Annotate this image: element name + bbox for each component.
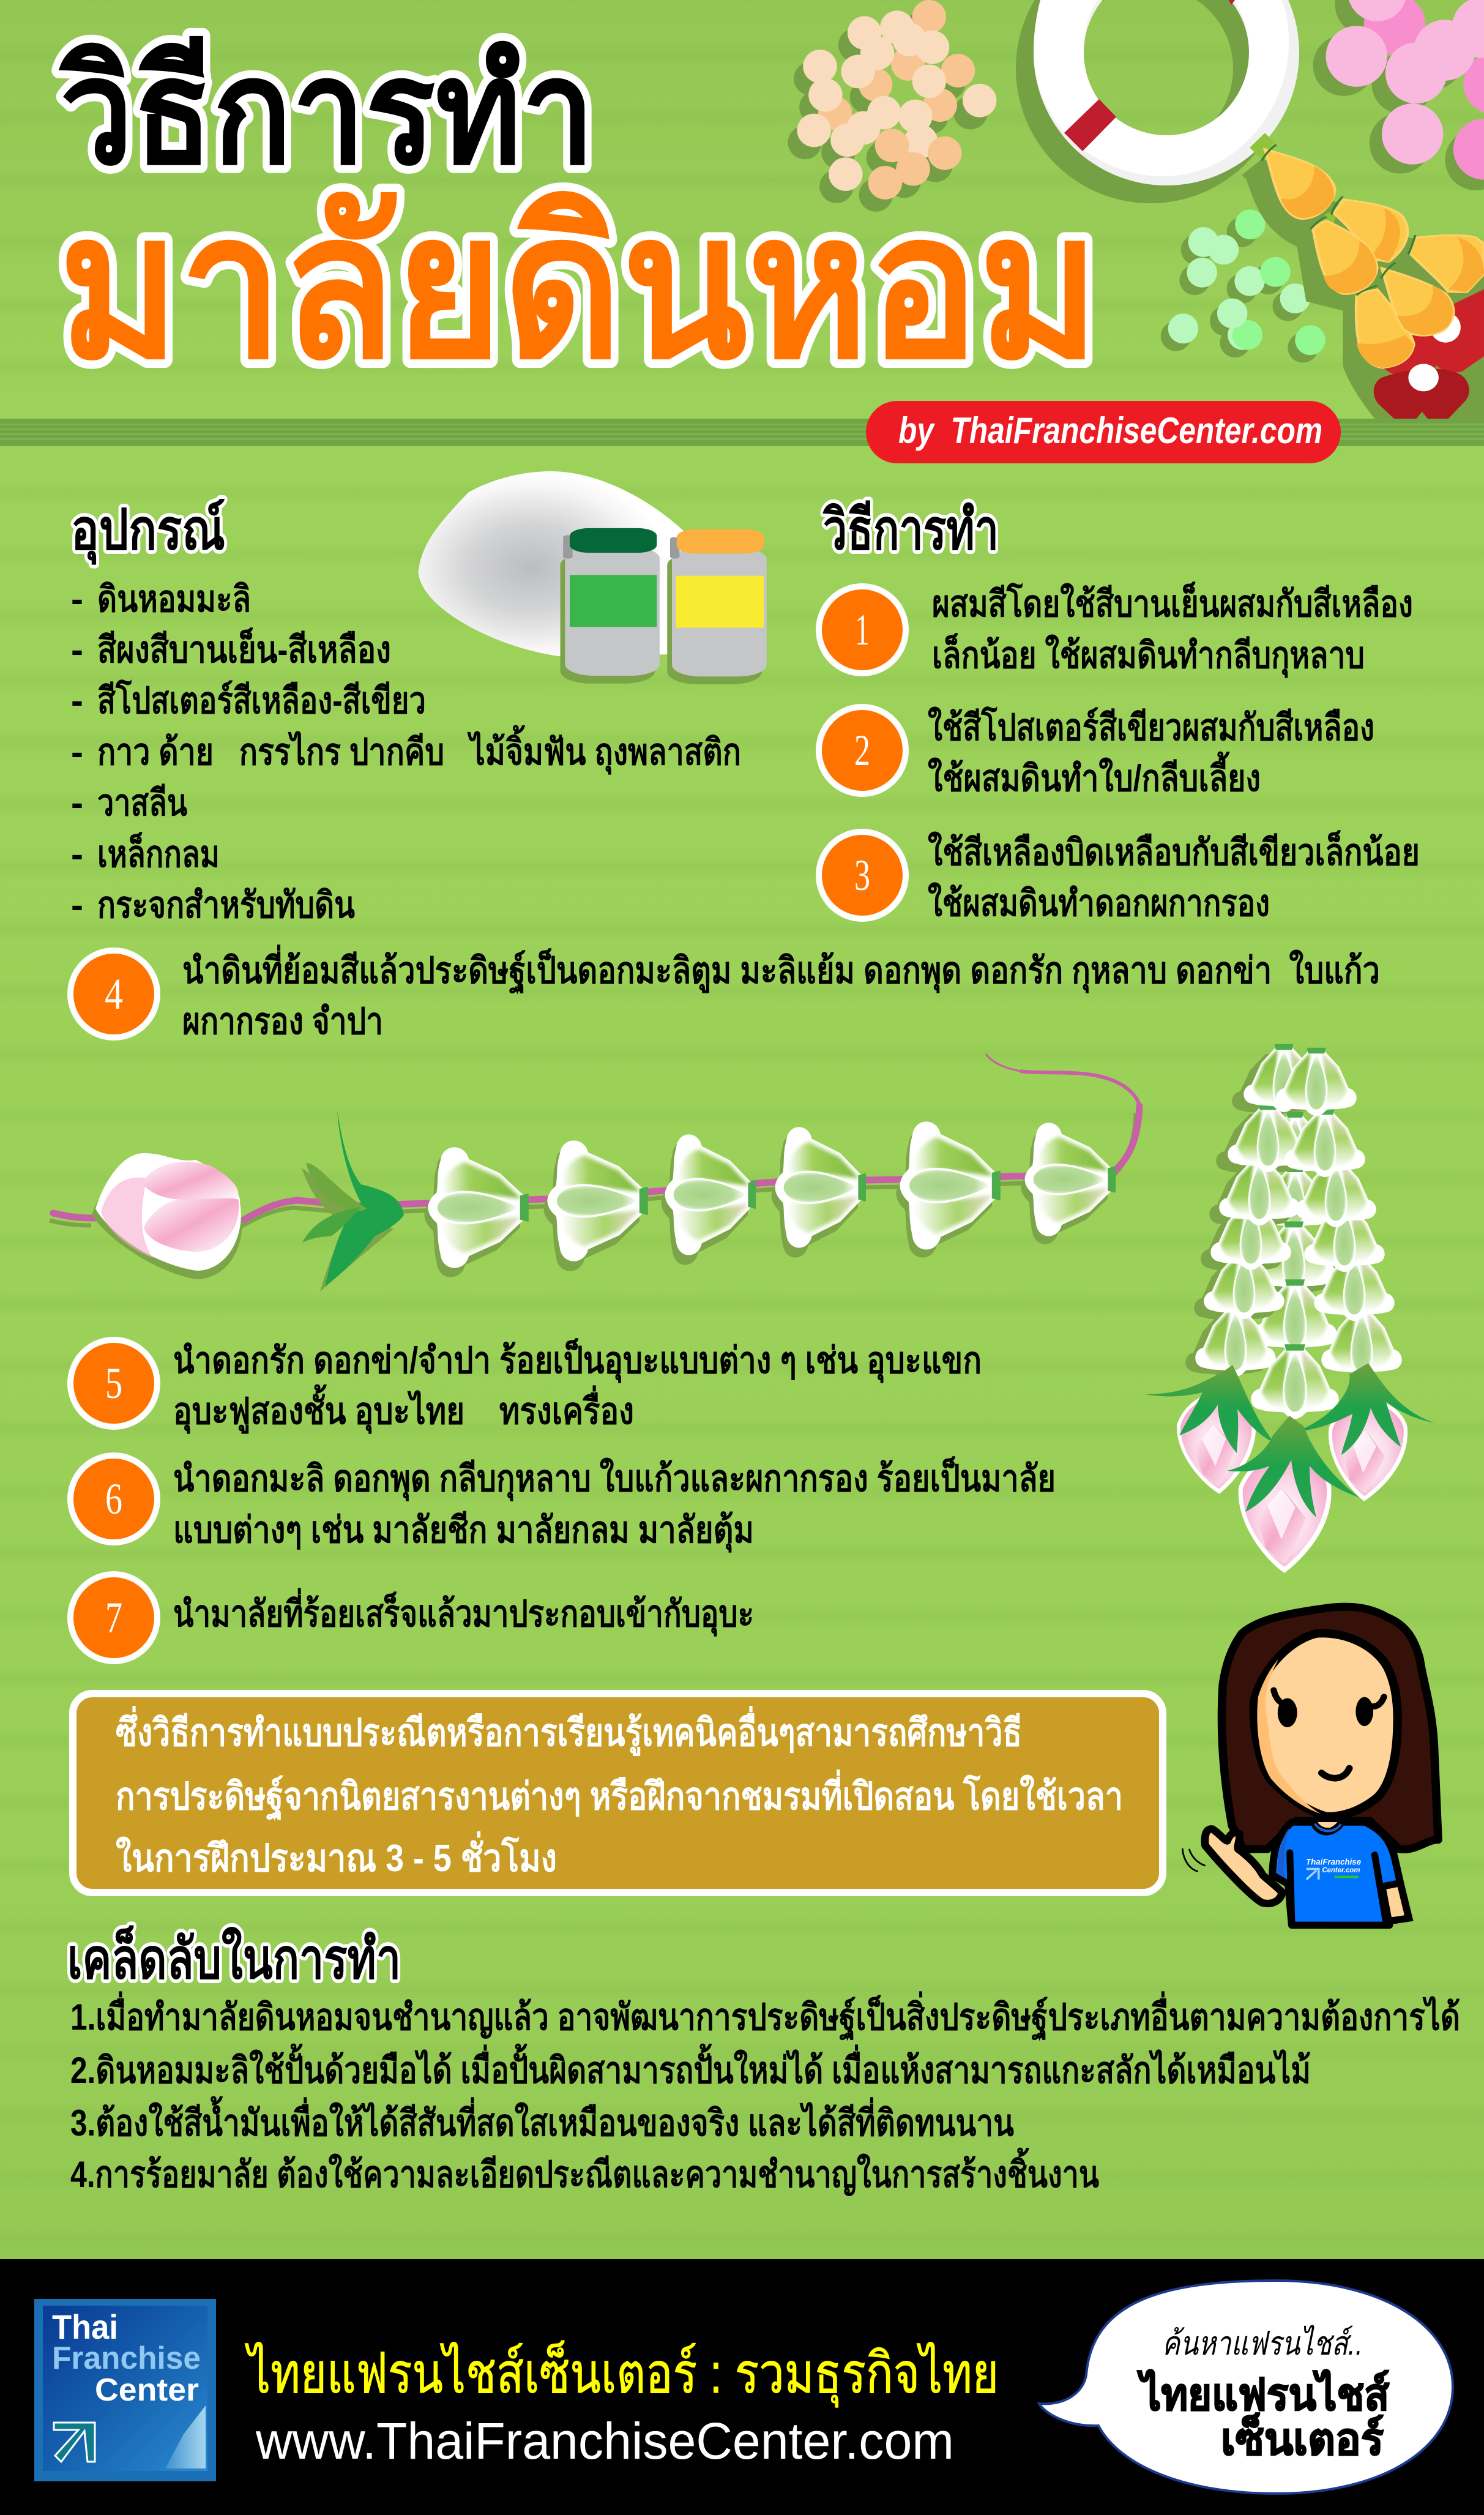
tips list: 3.ต้องใช้สีน้ำมันเพื่อให้ได้สีสันที่สดใสเหมือนของจริง และได้สีที่ติดทนนาน xyxy=(70,2096,1014,2143)
step 7: 7 xyxy=(105,1593,122,1642)
step 3: ใช้ผสมดินทำดอกผกากรอง xyxy=(928,882,1270,924)
list of materials: กาว ด้าย กรรไกร ปากคีบ ไม้จิ้มฟัน ถุงพลาสติก xyxy=(97,725,741,775)
list of materials: เหล็กกลม xyxy=(97,832,220,875)
stem thread xyxy=(50,1054,1139,1227)
decoration: peach beads xyxy=(788,0,996,212)
tips list: 4.การร้อยมาลัย ต้องใช้ความละเอียดประณีตและความชำนาญในการสร้างชิ้นงาน xyxy=(70,2147,1099,2196)
logo: Thai xyxy=(52,2308,118,2346)
illustration: hanging garland xyxy=(1145,1044,1435,1573)
list of materials: - xyxy=(71,834,83,875)
panel: materials xyxy=(71,498,741,925)
green sepals xyxy=(1145,1363,1435,1517)
step 6 xyxy=(70,1456,1056,1553)
step 3 xyxy=(819,830,1420,924)
step 4: 4 xyxy=(105,970,123,1018)
list of materials: สีผงสีบานเย็น-สีเหลือง xyxy=(97,627,391,670)
speech bubble: เซ็นเตอร์ xyxy=(1221,2413,1384,2464)
decoration: pink beads xyxy=(1313,0,1484,190)
right arm stub xyxy=(1382,1883,1409,1922)
eyes xyxy=(1273,1690,1384,1727)
logo xyxy=(34,2299,216,2481)
t-shirt xyxy=(1272,1822,1400,1925)
step 2: 2 xyxy=(854,726,870,775)
list of materials: - xyxy=(71,884,83,925)
callout: further study: ซึ่งวิธีการทำแบบประณีตหรือการเรียนรู้เทคนิคอื่นๆสามารถศึกษาวิธี xyxy=(116,1706,1022,1756)
six jasmine flowers xyxy=(424,1121,1116,1277)
character: waving girl xyxy=(1182,1607,1438,1925)
footer headline: ไทยแฟรนไชส์เซ็นเตอร์ : รวมธุรกิจไทย xyxy=(244,2340,999,2408)
wave marks xyxy=(1182,1849,1205,1871)
step 4 xyxy=(70,944,1380,1042)
decoration: yellow flowers and red blossom xyxy=(1242,133,1484,419)
list of materials: - xyxy=(71,578,83,619)
panel: tips xyxy=(67,1925,1460,2196)
flower column: left xyxy=(1185,1044,1324,1380)
list of materials: - xyxy=(71,629,83,670)
face xyxy=(1254,1633,1398,1817)
step 7 xyxy=(70,1574,754,1661)
speech bubble: ไทยแฟรนไชส์ xyxy=(1137,2369,1389,2420)
sepal leaves xyxy=(302,1110,404,1291)
illustration: horizontal garland xyxy=(50,1054,1139,1291)
callout: further study xyxy=(73,1694,1163,1893)
neck xyxy=(1316,1822,1341,1831)
shirt logo text xyxy=(1306,1857,1361,1880)
callout: further study: การประดิษฐ์จากนิตยสารงานต่างๆ หรือฝึกจากชมรมที่เปิดสอน โดยใช้เวลา xyxy=(116,1769,1123,1821)
smile xyxy=(1322,1768,1349,1778)
tips list xyxy=(70,1991,1460,2196)
step 4: ผกากรอง จำปา xyxy=(182,1001,383,1042)
flower column: right xyxy=(1276,1048,1402,1378)
list of materials: วาสลีน xyxy=(97,782,187,823)
logo: Franchise xyxy=(52,2341,201,2376)
footer xyxy=(0,2259,1484,2515)
clay bag xyxy=(419,471,686,656)
step 2: ใช้สีโปสเตอร์สีเขียวผสมกับสีเหลือง xyxy=(928,706,1374,748)
title: line one: วิธีการทำ xyxy=(58,30,595,194)
step 3: 3 xyxy=(854,851,870,900)
title: line two: มาลัยดินหอม xyxy=(59,173,1100,399)
header band xyxy=(0,419,1484,446)
waving hand xyxy=(1205,1829,1282,1904)
flower: bottom centre xyxy=(1251,1344,1339,1419)
decoration: life ring xyxy=(1016,0,1299,203)
byline badge: by ThaiFranchiseCenter.com xyxy=(898,410,1322,451)
step 1 xyxy=(819,581,1413,678)
yellow paint bottle xyxy=(667,529,767,684)
logo: Center xyxy=(95,2372,199,2408)
decoration: green beads xyxy=(1161,209,1326,363)
footer url: www.ThaiFranchiseCenter.com xyxy=(255,2412,954,2470)
step 5 xyxy=(70,1338,982,1434)
list of materials: ดินหอมมะลิ xyxy=(97,578,251,619)
icon: clay bag and paint bottles xyxy=(419,471,767,684)
shirt logo text: Center.com xyxy=(1322,1866,1360,1874)
shirt logo text: ThaiFranchise xyxy=(1306,1857,1361,1867)
step 7: นำมาลัยที่ร้อยเสร็จแล้วมาประกอบเข้ากับอุบะ xyxy=(173,1588,754,1637)
heading: method: วิธีการทำ xyxy=(822,499,999,561)
hair xyxy=(1221,1607,1438,1849)
rosebud xyxy=(92,1153,242,1279)
speech bubble: ค้นหาแฟรนไชส์.. xyxy=(1162,2325,1363,2362)
heading: tips: เคล็ดลับในการทำ xyxy=(67,1925,401,1990)
step 6: 6 xyxy=(105,1474,122,1523)
step 1: 1 xyxy=(855,605,870,654)
panel: method steps one to three xyxy=(819,499,1420,924)
step 6: แบบต่างๆ เช่น มาลัยชีก มาลัยกลม มาลัยตุ้ม xyxy=(173,1509,754,1553)
step 5: อุบะฟูสองชั้น อุบะไทย ทรงเครื่อง xyxy=(173,1384,634,1434)
callout: further study: ในการฝึกประมาณ 3 - 5 ชั่วโมง xyxy=(116,1831,557,1880)
step 5: 5 xyxy=(105,1359,122,1408)
list of materials: กระจกสำหรับทับดิน xyxy=(97,884,355,925)
step 2: ใช้ผสมดินทำใบ/กลีบเลี้ยง xyxy=(928,751,1261,799)
step 5: นำดอกรัก ดอกข่า/จำปา ร้อยเป็นอุบะแบบต่าง ๆ เช่น อุบะแขก xyxy=(173,1338,982,1383)
speech bubble xyxy=(1039,2281,1453,2494)
list of materials: - xyxy=(71,731,83,772)
byline badge xyxy=(866,401,1341,463)
face shade xyxy=(1257,1659,1321,1814)
list of materials: - xyxy=(71,782,83,823)
green paint bottle xyxy=(561,528,660,684)
pink buds xyxy=(1175,1391,1409,1573)
list of materials: สีโปสเตอร์สีเหลือง-สีเขียว xyxy=(97,679,426,721)
heading: materials: อุปกรณ์ xyxy=(71,498,225,565)
list of materials xyxy=(71,578,741,925)
step 2 xyxy=(819,706,1374,799)
step 6: นำดอกมะลิ ดอกพุด กลีบกุหลาบ ใบแก้วและผกากรอง ร้อยเป็นมาลัย xyxy=(173,1456,1056,1501)
flower column: centre xyxy=(1243,1112,1337,1354)
step 1: เล็กน้อย ใช้ผสมดินทำกลีบกุหลาบ xyxy=(932,633,1365,678)
list of materials: - xyxy=(71,680,83,721)
